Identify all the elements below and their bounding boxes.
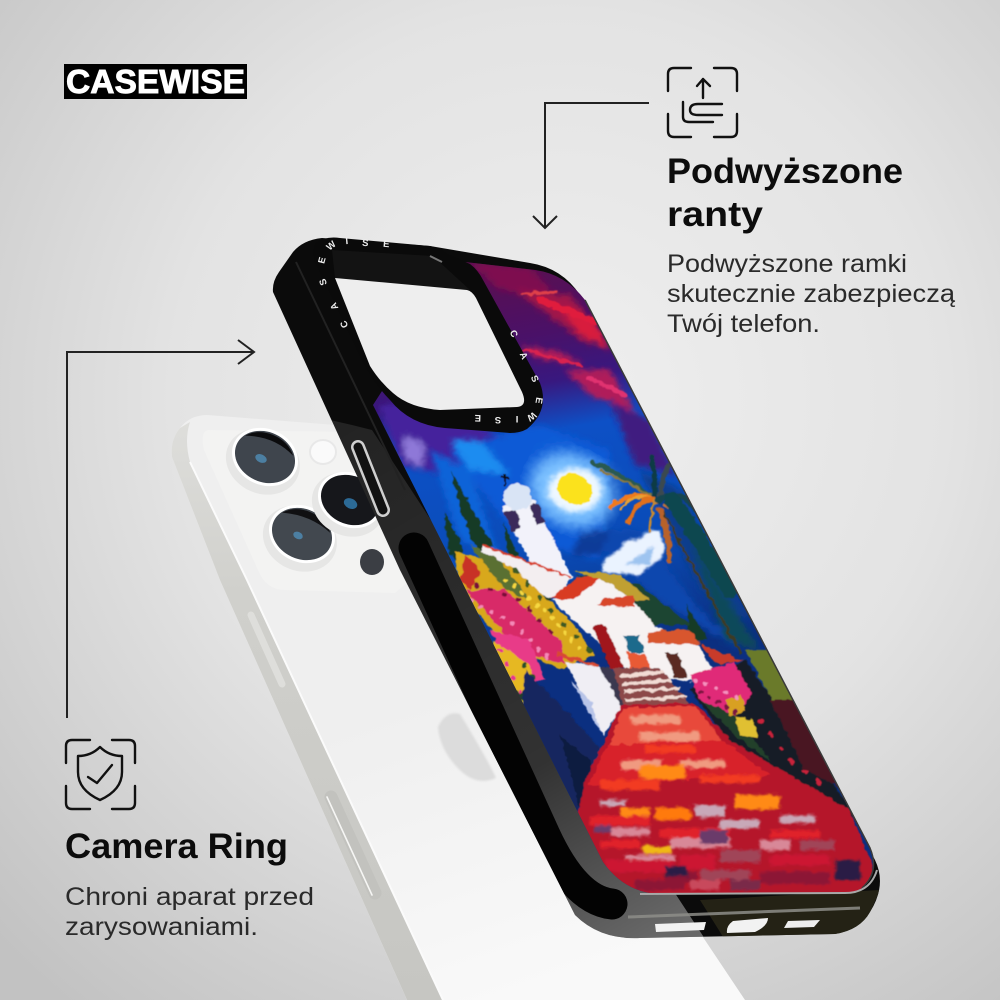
- sky red streaks: [522, 292, 625, 395]
- heading: camera ring: Camera Ring: [65, 827, 288, 866]
- lens 2: [252, 493, 348, 584]
- ring lettering: A: [517, 351, 530, 361]
- ring lettering: S: [317, 277, 330, 287]
- painting on case back: [360, 250, 890, 910]
- art edge highlight: [585, 300, 874, 888]
- far hillside: [575, 575, 690, 625]
- sky red clouds: [380, 262, 675, 475]
- moon glow: [517, 439, 627, 541]
- ring lettering: E: [532, 396, 544, 405]
- bushes dark green: [470, 545, 530, 600]
- ring lettering: E: [383, 239, 390, 250]
- usb port: [727, 918, 768, 933]
- black side window band: [414, 548, 612, 904]
- text: camera ring description: Chroni aparat przed: [65, 883, 314, 911]
- arrow to camera ring: [67, 340, 254, 718]
- church tower: [501, 474, 572, 594]
- ring lettering: A: [328, 301, 341, 311]
- side rail highlight: [295, 262, 392, 460]
- heading: raised edges: Podwyższone: [667, 152, 903, 191]
- phone side frame: [172, 422, 443, 1000]
- window: [623, 635, 645, 653]
- text: camera ring description: zarysowaniami.: [65, 913, 258, 941]
- cobble path: [575, 703, 885, 900]
- palm fronds: [592, 457, 730, 590]
- icon: raised edges: [668, 68, 737, 137]
- cypress trees: [444, 472, 708, 640]
- dark door: [665, 653, 688, 678]
- dark right slope: [690, 659, 854, 819]
- text: raised edges description: Podwyższone ramki: [667, 250, 907, 278]
- roof 1: [550, 578, 600, 600]
- camera ring: [314, 236, 544, 433]
- art bottom highlight: [640, 870, 877, 894]
- ring lettering: S: [495, 414, 501, 425]
- moon: [556, 472, 594, 506]
- ring lettering: W: [324, 239, 338, 253]
- ring lettering: C: [507, 329, 520, 339]
- text: raised edges description: Twój telefon.: [667, 310, 820, 338]
- text: raised edges description: skutecznie zabezpieczą: [667, 280, 955, 308]
- ring wall highlight: [430, 256, 442, 262]
- ring lettering: E: [316, 256, 329, 265]
- low white wall: [565, 662, 622, 735]
- roof 4: [702, 645, 743, 665]
- ring lettering: [316, 236, 544, 425]
- heading: raised edges: [667, 152, 903, 234]
- palm trunk: [662, 510, 742, 655]
- ring lettering: I: [516, 413, 518, 424]
- ring lettering: S: [362, 238, 369, 249]
- bushes pink: [465, 590, 565, 665]
- ring lettering: S: [528, 374, 541, 384]
- stairs: [613, 668, 692, 710]
- heading: raised edges: ranty: [667, 195, 764, 234]
- bottom lip highlight: [628, 908, 860, 917]
- bottom olive tint: [700, 890, 880, 940]
- roof 2: [597, 596, 635, 607]
- cobbles: [590, 715, 860, 890]
- red door: [593, 624, 624, 669]
- logo: CASEWISE: CASEWISE: [66, 63, 245, 100]
- text: camera ring description: [65, 883, 314, 941]
- frame highlight: [190, 462, 443, 1000]
- ring hole: [335, 278, 524, 410]
- side button inner: [358, 447, 383, 510]
- lens 1: [215, 416, 311, 507]
- icon: shield: [66, 740, 135, 809]
- white phone behind the case: [172, 415, 745, 1000]
- arrow to raised edges: [533, 103, 649, 228]
- ring lettering: E: [475, 412, 481, 423]
- lidar sensor: [360, 549, 384, 575]
- phone buttons: [251, 615, 375, 895]
- flash: [310, 440, 336, 464]
- ring inner wall: [332, 250, 470, 290]
- church building: [552, 578, 712, 682]
- church wall: [480, 545, 570, 600]
- text: raised edges description: [667, 250, 955, 338]
- roof 3: [647, 629, 701, 645]
- speaker hole: [655, 922, 706, 932]
- translucent tint over white phone: [332, 420, 704, 938]
- black phone case: [273, 238, 880, 965]
- orange porch: [627, 652, 652, 672]
- right flower bush: [690, 662, 752, 715]
- ring lettering: W: [525, 409, 538, 423]
- camera plate: [203, 430, 410, 593]
- dark lower left foliage: [521, 668, 600, 812]
- yellow bushes lower: [492, 640, 533, 694]
- ring lettering: C: [338, 319, 351, 329]
- white cloud: [603, 530, 664, 575]
- case body: [273, 238, 880, 938]
- apple logo shadow: [438, 713, 496, 781]
- right flower dabs: [695, 680, 830, 790]
- flower dabs: [470, 570, 590, 715]
- bushes yellow: [455, 552, 595, 670]
- ring body: [314, 238, 543, 433]
- speaker hole right: [784, 920, 820, 928]
- side button: [358, 447, 383, 510]
- blue sky strokes: [430, 425, 760, 650]
- lens 3: [301, 460, 395, 548]
- ring lettering: I: [345, 236, 349, 247]
